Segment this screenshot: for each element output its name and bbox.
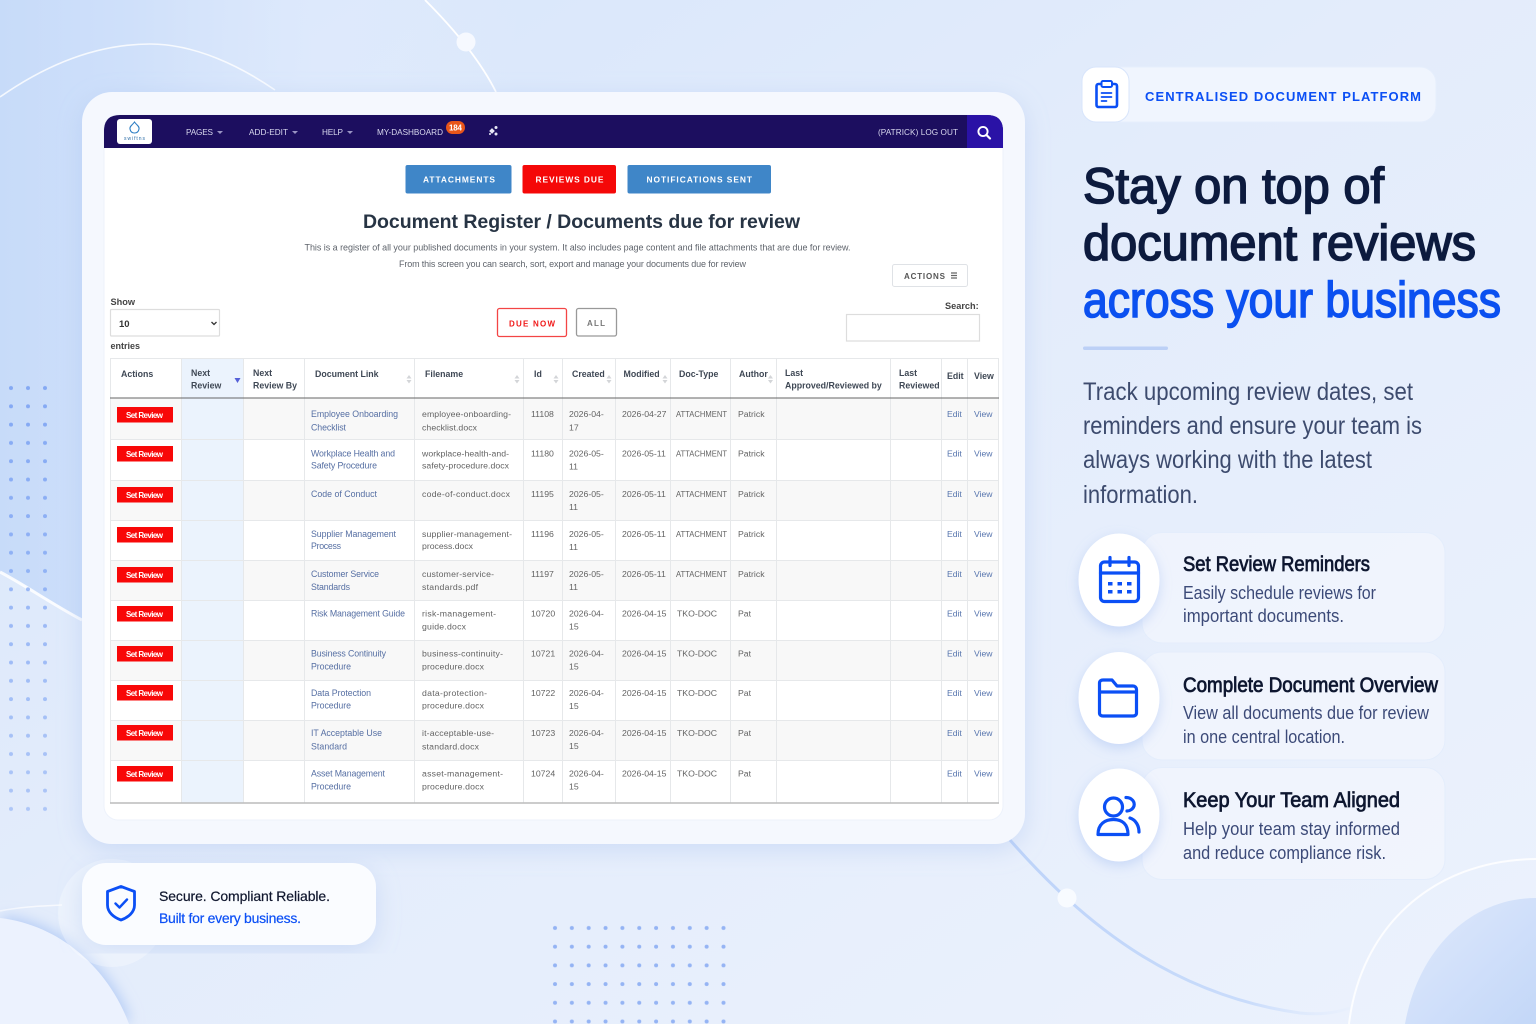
row: IT Acceptable Use Standard: Edit bbox=[947, 728, 962, 738]
feature card: complete document overview: View all documents due for review bbox=[1183, 703, 1430, 723]
register heading: Document Register / Documents due for review bbox=[363, 211, 801, 233]
row: Workplace Health and Safety Procedure: View bbox=[974, 448, 993, 458]
feature card: set review reminders bbox=[1078, 532, 1445, 643]
table header: Next bbox=[191, 368, 210, 378]
navigation bar: 184 bbox=[449, 124, 463, 132]
table header: Edit bbox=[947, 371, 964, 381]
feature card: set review reminders: Easily schedule reviews for bbox=[1183, 583, 1376, 603]
filter buttons: ALL bbox=[587, 319, 605, 328]
dot grid left bbox=[9, 386, 47, 811]
table header: Created bbox=[572, 369, 605, 379]
row: Risk Management Guide: guide.docx bbox=[422, 622, 467, 632]
row: Employee Onboarding Checklist: ATTACHMENT bbox=[676, 409, 727, 419]
row: Risk Management Guide: 2026-04- bbox=[569, 608, 604, 618]
tab buttons: REVIEWS DUE bbox=[536, 174, 604, 184]
row: Data Protection Procedure: Procedure bbox=[311, 700, 351, 710]
row: Asset Management Procedure: 15 bbox=[569, 782, 579, 792]
row: Supplier Management Process: 11196 bbox=[531, 529, 554, 539]
show entries control: entries bbox=[110, 341, 140, 351]
navigation bar bbox=[104, 115, 1003, 148]
row: Business Continuity Procedure: 10721 bbox=[531, 648, 555, 658]
row: IT Acceptable Use Standard bbox=[117, 725, 993, 752]
row: Business Continuity Procedure: procedure.docx bbox=[422, 662, 485, 672]
search box: Search: bbox=[945, 301, 979, 311]
navigation bar: swiftns bbox=[124, 136, 146, 142]
feature card: keep your team aligned: and reduce compliance risk. bbox=[1183, 843, 1386, 863]
row: Business Continuity Procedure: Set Review bbox=[126, 650, 164, 659]
row: Data Protection Procedure: 15 bbox=[569, 701, 579, 711]
table header: Id bbox=[534, 369, 542, 379]
row: IT Acceptable Use Standard: Set Review bbox=[126, 729, 164, 738]
actions button: ACTIONS bbox=[904, 272, 946, 281]
row: Employee Onboarding Checklist: checklist.docx bbox=[422, 422, 478, 432]
row: Workplace Health and Safety Procedure: 11 bbox=[569, 462, 578, 472]
row: Risk Management Guide: Set Review bbox=[126, 610, 164, 619]
icon: team bbox=[1098, 798, 1139, 834]
row: Employee Onboarding Checklist bbox=[117, 407, 993, 432]
row: Data Protection Procedure: 2026-04-15 bbox=[622, 688, 667, 698]
row: Data Protection Procedure: TKO-DOC bbox=[677, 688, 717, 698]
filter buttons: DUE NOW bbox=[509, 320, 555, 328]
register description: From this screen you can search, sort, export and manage your documents due for review bbox=[399, 259, 746, 269]
row: Supplier Management Process: Edit bbox=[947, 529, 962, 539]
screen body bbox=[104, 115, 1003, 820]
row: Supplier Management Process: process.docx bbox=[422, 541, 474, 551]
table header: View bbox=[974, 371, 994, 381]
row: Supplier Management Process: Set Review bbox=[126, 531, 164, 540]
row: Risk Management Guide: 2026-04-15 bbox=[622, 608, 667, 618]
icon: folder bbox=[1100, 680, 1136, 716]
row: Employee Onboarding Checklist: Edit bbox=[947, 409, 962, 419]
search box bbox=[846, 301, 980, 341]
row: Employee Onboarding Checklist: Checklist bbox=[311, 422, 347, 432]
row: IT Acceptable Use Standard: 2026-04-15 bbox=[622, 728, 667, 738]
table header: Review bbox=[191, 380, 221, 390]
row: Supplier Management Process: supplier-management- bbox=[422, 529, 512, 539]
feature card: complete document overview bbox=[1078, 652, 1445, 760]
row: Data Protection Procedure: View bbox=[974, 688, 993, 698]
row: IT Acceptable Use Standard: 15 bbox=[569, 741, 579, 751]
row: Risk Management Guide: TKO-DOC bbox=[677, 608, 717, 618]
document table bbox=[110, 358, 999, 803]
row: Risk Management Guide: risk-management- bbox=[422, 608, 496, 618]
connector line top with node bbox=[425, 0, 496, 92]
table header: Author bbox=[739, 369, 768, 379]
row: Employee Onboarding Checklist: View bbox=[974, 409, 993, 419]
row: Business Continuity Procedure: Business Continuity bbox=[311, 648, 387, 658]
row: Customer Service Standards: Set Review bbox=[126, 571, 164, 580]
register description bbox=[304, 242, 850, 269]
show entries control: 10 bbox=[119, 319, 130, 330]
row: Workplace Health and Safety Procedure: 2026-05- bbox=[569, 448, 604, 458]
row: Supplier Management Process: ATTACHMENT bbox=[676, 529, 727, 539]
row: Data Protection Procedure bbox=[117, 685, 993, 711]
row: Workplace Health and Safety Procedure: safety-procedure.docx bbox=[422, 460, 510, 470]
main heading: document reviews bbox=[1083, 215, 1476, 271]
row: Supplier Management Process: View bbox=[974, 529, 993, 539]
row: Asset Management Procedure: 2026-04-15 bbox=[622, 768, 667, 778]
row: Risk Management Guide: 10720 bbox=[531, 608, 555, 618]
row: IT Acceptable Use Standard: View bbox=[974, 728, 993, 738]
callout: secure compliant reliable bbox=[82, 863, 376, 945]
actions button bbox=[892, 264, 968, 286]
row: Supplier Management Process bbox=[117, 527, 993, 552]
row: Employee Onboarding Checklist: Set Review bbox=[126, 411, 164, 420]
row: Employee Onboarding Checklist: 17 bbox=[569, 422, 579, 432]
row: Data Protection Procedure: 2026-04- bbox=[569, 688, 604, 698]
row: IT Acceptable Use Standard: IT Acceptable Use bbox=[311, 728, 382, 738]
row: Employee Onboarding Checklist: 2026-04-27 bbox=[622, 409, 667, 419]
row: Employee Onboarding Checklist: 11108 bbox=[531, 409, 554, 419]
row: Asset Management Procedure: Edit bbox=[947, 768, 962, 778]
navigation bar: PAGES bbox=[186, 128, 214, 137]
feature card: complete document overview: Complete Document Overview bbox=[1183, 674, 1439, 697]
feature card: keep your team aligned: Help your team stay informed bbox=[1183, 819, 1400, 839]
table header: Actions bbox=[121, 369, 153, 379]
row: Data Protection Procedure: Set Review bbox=[126, 689, 164, 698]
row: IT Acceptable Use Standard: Standard bbox=[311, 742, 347, 752]
row: IT Acceptable Use Standard: Pat bbox=[738, 728, 752, 738]
badge: centralised document platform: CENTRALISED DOCUMENT PLATFORM bbox=[1145, 89, 1421, 104]
row: Risk Management Guide: 15 bbox=[569, 622, 579, 632]
row: Customer Service Standards: Patrick bbox=[738, 569, 765, 579]
row: IT Acceptable Use Standard: standard.docx bbox=[422, 742, 480, 752]
row: Asset Management Procedure: 2026-04- bbox=[569, 768, 604, 778]
row: Code of Conduct: code-of-conduct.docx bbox=[422, 489, 511, 499]
row: Risk Management Guide: Edit bbox=[947, 608, 962, 618]
row: Business Continuity Procedure: Pat bbox=[738, 648, 752, 658]
row: Workplace Health and Safety Procedure: Set Review bbox=[126, 450, 164, 459]
row: Code of Conduct: 11 bbox=[569, 502, 578, 512]
row: Data Protection Procedure: data-protection- bbox=[422, 688, 487, 698]
navigation bar: MY-DASHBOARD bbox=[377, 128, 443, 137]
row: Workplace Health and Safety Procedure: ATTACHMENT bbox=[676, 448, 727, 458]
row: Supplier Management Process: 11 bbox=[569, 542, 578, 552]
row: Code of Conduct: 2026-05-11 bbox=[622, 489, 666, 499]
tab buttons bbox=[406, 165, 771, 194]
filter buttons bbox=[498, 308, 616, 336]
row: Code of Conduct: Code of Conduct bbox=[311, 489, 378, 499]
main heading: Stay on top of bbox=[1083, 158, 1384, 214]
row: Customer Service Standards: standards.pdf bbox=[422, 582, 479, 592]
row: Workplace Health and Safety Procedure: Edit bbox=[947, 448, 962, 458]
feature card: set review reminders: important documents. bbox=[1183, 606, 1344, 626]
row: Risk Management Guide: View bbox=[974, 608, 993, 618]
row: Asset Management Procedure: View bbox=[974, 768, 993, 778]
row: Supplier Management Process: 2026-05- bbox=[569, 529, 604, 539]
feature card: keep your team aligned bbox=[1078, 768, 1445, 880]
intro paragraph bbox=[1083, 378, 1422, 509]
table header bbox=[121, 368, 994, 390]
table header: Next bbox=[253, 368, 272, 378]
row: Asset Management Procedure: TKO-DOC bbox=[677, 768, 717, 778]
row: Business Continuity Procedure: 15 bbox=[569, 662, 579, 672]
row: Employee Onboarding Checklist: employee-onboarding- bbox=[422, 409, 511, 419]
row: Asset Management Procedure: Set Review bbox=[126, 770, 164, 779]
row: Asset Management Procedure: Pat bbox=[738, 768, 752, 778]
row: Workplace Health and Safety Procedure: workplace-health-and- bbox=[421, 448, 509, 458]
row: Customer Service Standards: customer-service- bbox=[422, 569, 494, 579]
icon: clipboard bbox=[1096, 81, 1117, 107]
intro paragraph: reminders and ensure your team is bbox=[1083, 412, 1422, 440]
table header: Review By bbox=[253, 380, 297, 390]
row: Code of Conduct bbox=[117, 487, 993, 512]
row: IT Acceptable Use Standard: TKO-DOC bbox=[677, 728, 717, 738]
row: Code of Conduct: Patrick bbox=[738, 489, 765, 499]
icon: calendar bbox=[1100, 558, 1138, 602]
row: Workplace Health and Safety Procedure: Workplace Health and bbox=[311, 448, 395, 458]
panel: app screenshot frame bbox=[82, 92, 1025, 844]
row: Asset Management Procedure: procedure.docx bbox=[422, 782, 485, 792]
navigation bar: ADD-EDIT bbox=[249, 128, 288, 137]
row: Customer Service Standards: Edit bbox=[947, 569, 962, 579]
row: IT Acceptable Use Standard: 2026-04- bbox=[569, 728, 604, 738]
row: Asset Management Procedure: Procedure bbox=[311, 782, 351, 792]
table header: Approved/Reviewed by bbox=[785, 380, 882, 390]
row: Business Continuity Procedure bbox=[117, 646, 993, 672]
row: Customer Service Standards: 11 bbox=[569, 582, 578, 592]
show entries control bbox=[110, 297, 220, 351]
table header: Document Link bbox=[315, 369, 379, 379]
register description: This is a register of all your published documents in your system. It also includes page content and file attachments that are due for review. bbox=[304, 242, 850, 252]
row: Business Continuity Procedure: business-continuity- bbox=[422, 648, 503, 658]
row: Supplier Management Process: Patrick bbox=[738, 529, 765, 539]
row: Code of Conduct: ATTACHMENT bbox=[676, 489, 727, 499]
row: Employee Onboarding Checklist: Patrick bbox=[738, 409, 765, 419]
row: Code of Conduct: Set Review bbox=[126, 491, 164, 500]
row: Workplace Health and Safety Procedure: 11180 bbox=[531, 448, 554, 458]
row: Supplier Management Process: Process bbox=[311, 541, 342, 551]
navigation bar: HELP bbox=[322, 128, 344, 137]
row: Data Protection Procedure: 10722 bbox=[531, 688, 555, 698]
table header: Last bbox=[899, 368, 917, 378]
row: Customer Service Standards: Customer Service bbox=[311, 569, 379, 579]
tab buttons: NOTIFICATIONS SENT bbox=[646, 174, 753, 184]
intro paragraph: Track upcoming review dates, set bbox=[1083, 378, 1413, 406]
feature card: complete document overview: in one central location. bbox=[1183, 727, 1345, 747]
row: Employee Onboarding Checklist: 2026-04- bbox=[569, 409, 604, 419]
row: Customer Service Standards bbox=[117, 567, 993, 592]
row: Business Continuity Procedure: TKO-DOC bbox=[677, 648, 717, 658]
icon: shield bbox=[108, 886, 134, 920]
row: Customer Service Standards: View bbox=[974, 569, 993, 579]
navigation bar: (PATRICK) LOG OUT bbox=[878, 128, 958, 137]
table header: Reviewed bbox=[899, 380, 940, 390]
row: Business Continuity Procedure: Procedure bbox=[311, 662, 351, 672]
feature card: keep your team aligned: Keep Your Team Aligned bbox=[1183, 789, 1400, 812]
row: Workplace Health and Safety Procedure bbox=[117, 446, 993, 472]
row: Data Protection Procedure: Data Protection bbox=[311, 688, 371, 698]
dot grid bottom bbox=[546, 919, 732, 1024]
table header: Modified bbox=[624, 369, 660, 379]
row: Asset Management Procedure: 10724 bbox=[531, 768, 555, 778]
row: IT Acceptable Use Standard: it-acceptable-use- bbox=[422, 728, 494, 738]
row: Data Protection Procedure: Pat bbox=[738, 688, 752, 698]
row: Asset Management Procedure: Asset Management bbox=[311, 768, 386, 778]
row: Workplace Health and Safety Procedure: Patrick bbox=[738, 448, 765, 458]
badge: centralised document platform bbox=[1082, 67, 1436, 122]
row: IT Acceptable Use Standard: 10723 bbox=[531, 728, 555, 738]
row: Code of Conduct: 11195 bbox=[531, 489, 554, 499]
intro paragraph: always working with the latest bbox=[1083, 446, 1372, 474]
row: Code of Conduct: Edit bbox=[947, 489, 962, 499]
table header: Doc-Type bbox=[679, 369, 719, 379]
row: Employee Onboarding Checklist: Employee Onboarding bbox=[311, 409, 398, 419]
row: Customer Service Standards: 2026-05- bbox=[569, 569, 604, 579]
row: Business Continuity Procedure: 2026-04- bbox=[569, 648, 604, 658]
row: Supplier Management Process: 2026-05-11 bbox=[622, 529, 666, 539]
connector line bottom with node bbox=[1010, 840, 1350, 1014]
row: Asset Management Procedure bbox=[117, 766, 993, 792]
row: Customer Service Standards: ATTACHMENT bbox=[676, 569, 727, 579]
row: Data Protection Procedure: procedure.docx bbox=[422, 700, 485, 710]
row: Business Continuity Procedure: View bbox=[974, 648, 993, 658]
callout: secure compliant reliable: Built for every business. bbox=[159, 910, 301, 926]
row: Workplace Health and Safety Procedure: 2026-05-11 bbox=[622, 448, 666, 458]
table stripes and grid bbox=[110, 358, 999, 803]
table header: Filename bbox=[425, 369, 463, 379]
row: Business Continuity Procedure: Edit bbox=[947, 648, 962, 658]
row: Asset Management Procedure: asset-management- bbox=[422, 768, 503, 778]
row: Customer Service Standards: 11197 bbox=[531, 569, 554, 579]
row: Code of Conduct: 2026-05- bbox=[569, 489, 604, 499]
show entries control: Show bbox=[110, 297, 136, 307]
callout: secure compliant reliable: Secure. Compliant Reliable. bbox=[159, 888, 330, 904]
row: Data Protection Procedure: Edit bbox=[947, 688, 962, 698]
row: Customer Service Standards: Standards bbox=[311, 582, 351, 592]
row: Business Continuity Procedure: 2026-04-15 bbox=[622, 648, 667, 658]
table header: Last bbox=[785, 368, 803, 378]
row: Customer Service Standards: 2026-05-11 bbox=[622, 569, 666, 579]
intro paragraph: information. bbox=[1083, 481, 1198, 509]
row: Supplier Management Process: Supplier Management bbox=[311, 529, 397, 539]
main heading bbox=[1083, 158, 1501, 328]
row: Risk Management Guide: Risk Management Guide bbox=[311, 608, 405, 618]
row: Risk Management Guide: Pat bbox=[738, 608, 752, 618]
row: Workplace Health and Safety Procedure: Safety Procedure bbox=[311, 460, 377, 470]
feature card: set review reminders: Set Review Reminders bbox=[1183, 553, 1370, 576]
row: Risk Management Guide bbox=[117, 606, 993, 632]
row: Code of Conduct: View bbox=[974, 489, 993, 499]
tab buttons: ATTACHMENTS bbox=[423, 174, 495, 184]
